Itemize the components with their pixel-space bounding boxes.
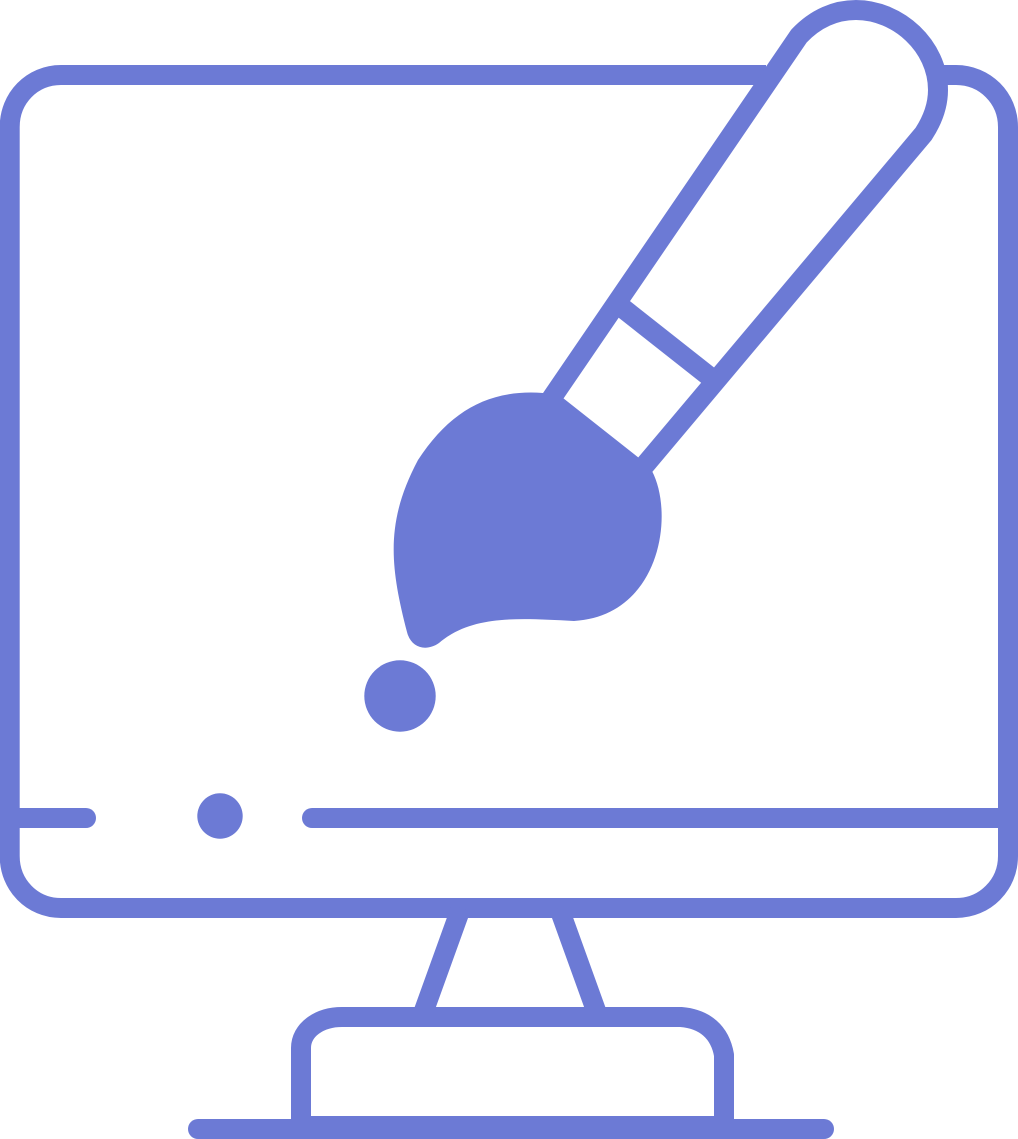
monitor frame: [10, 75, 1008, 908]
paint drop large: [364, 660, 436, 732]
brush handle: [549, 10, 938, 465]
paint drop small: [197, 793, 243, 839]
stand foot: [198, 1119, 824, 1139]
brush bristles: [394, 393, 662, 648]
screen baseline right segment: [312, 808, 1008, 828]
monitor stand base: [301, 1017, 724, 1126]
monitor neck: [424, 908, 596, 1012]
brush ferrule divider: [620, 306, 712, 379]
screen baseline left segment: [10, 808, 86, 828]
